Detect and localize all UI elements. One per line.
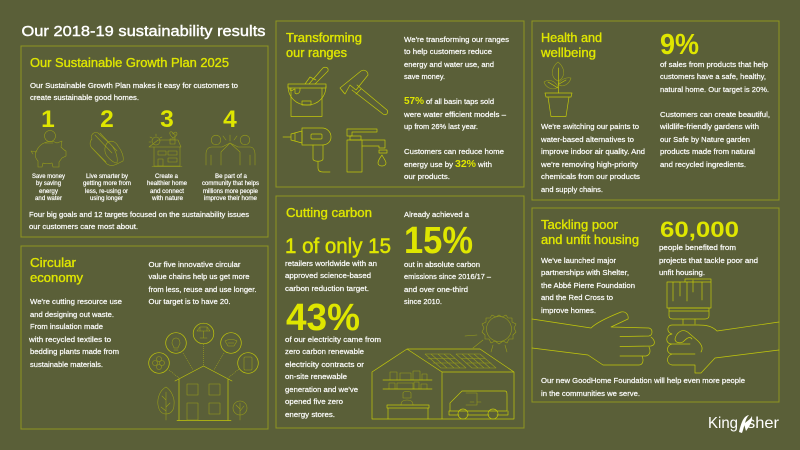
stat: 32% energy reduction: our products.: [404, 172, 450, 181]
stat: 43%: electricity contracts or: [285, 360, 364, 369]
text: circular value chains: value chains help us get more: [148, 272, 250, 281]
stat: 43%: [285, 297, 381, 419]
stat: 43%: 43%: [286, 297, 360, 339]
stat: 9%: natural home. Our target is 20%.: [660, 85, 769, 94]
stat: 57% of basin taps: were water efficient models –: [403, 110, 507, 119]
text: paints: and supply chains.: [541, 185, 603, 194]
heading: transforming our ranges: Transforming: [286, 31, 362, 45]
heading: health and wellbeing: Health and: [541, 31, 602, 45]
stat: 1 of only 15: [285, 235, 391, 293]
goal 3: healthier home: Create a: [155, 173, 178, 180]
goal 2: live smarter: getting more from: [83, 180, 131, 187]
text: transforming ranges: save money.: [404, 72, 445, 81]
stat: 43%: of our electricity came from: [285, 335, 381, 344]
stat: 15%: [404, 210, 492, 306]
heading: health and wellbeing: [540, 31, 602, 60]
panel: circular economy: [21, 246, 268, 429]
text: gardens: products made from natural: [660, 147, 755, 156]
goal 4: community: Be part of a: [215, 173, 247, 180]
goal 3: healthier home: and connect: [150, 188, 184, 195]
text: transforming ranges: [404, 35, 509, 81]
goal 3: healthier home: with nature: [151, 195, 183, 202]
text: partnerships: improve homes.: [541, 306, 596, 315]
stat: 15%: since 2010.: [404, 297, 442, 306]
text: circular value chains: from less, reuse and use longer.: [148, 285, 256, 294]
text: gardens: our Safe by Nature garden: [660, 135, 750, 144]
stat: 57% of basin taps: of all basin taps sold: [426, 97, 494, 106]
text: cutting resource use: with recycled textiles to: [28, 335, 111, 344]
stat: 15%: out in absolute carbon: [404, 260, 480, 269]
icon: hammer: [340, 70, 388, 115]
stat: 43%: generation and we've: [285, 385, 358, 394]
stat: 1 of only 15: retailers worldwide with an: [285, 259, 377, 268]
text: partnerships: the Abbé Pierre Foundation: [541, 281, 635, 290]
text: gardens: [659, 110, 770, 169]
text: transforming ranges: We're transforming our ranges: [404, 35, 509, 44]
goal 4: community: 4: [223, 106, 237, 133]
text: GoodHome Foundation: Our new GoodHome Foundation will help even more people: [541, 376, 745, 385]
text: gardens: and recycled ingredients.: [660, 160, 746, 169]
heading: tackling housing: and unfit housing: [541, 233, 639, 247]
icon: zero energy store: [372, 315, 516, 419]
goal 1: save money: and water: [35, 195, 63, 202]
text: circular value chains: Our target is to have 20.: [148, 297, 230, 306]
stat: 43%: on-site renewable: [285, 372, 347, 381]
stat: 60,000: 60,000: [660, 217, 739, 242]
goal 3: healthier home: healthier home: [147, 180, 187, 187]
closing text: [29, 210, 249, 231]
text: circular value chains: Our five innovative circular: [148, 260, 241, 269]
goal 4: community: improve their home: [204, 195, 257, 202]
title: Our 2018-19 sustainability results: [22, 24, 266, 40]
closing text: Four big goals and 12 targets focused on the sustainability issues: [29, 210, 249, 219]
panel: transforming our ranges: [276, 21, 524, 187]
stat: 32% energy reduction: [404, 147, 504, 181]
stat: 43%: zero carbon renewable: [285, 347, 364, 356]
text: cutting resource use: From insulation made: [30, 322, 103, 331]
text: paints: [540, 122, 645, 194]
text: gardens: Customers can create beautiful,: [660, 110, 770, 119]
stat: 1 of only 15: 1 of only 15: [285, 235, 391, 258]
text: cutting resource use: sustainable materials.: [30, 360, 103, 369]
text: transforming ranges: to help customers reduce: [404, 47, 492, 56]
stat: 15%: emissions since 2016/17 –: [404, 272, 492, 281]
goal 4: community: community that helps: [202, 180, 259, 187]
stat: 9%: [660, 29, 769, 94]
text: partnerships: partnerships with Shelter,: [541, 268, 629, 277]
stat: 60,000: [659, 217, 758, 277]
icon: drill: [283, 128, 331, 172]
stat: 57% of basin taps: up from 26% last year.: [404, 122, 478, 131]
goal 1: save money: energy: [39, 188, 59, 195]
logo: Kingfisher: sher: [747, 415, 780, 432]
stat: 32% energy reduction: with: [477, 160, 492, 169]
goal 2: live smarter: Live smarter by: [86, 173, 129, 180]
text: GoodHome Foundation: [541, 376, 745, 398]
stat: 60,000: people benefited from: [659, 243, 736, 252]
text: cutting resource use: We're cutting resource use: [30, 297, 122, 306]
goal 3: healthier home: 3: [160, 106, 174, 133]
text: cutting resource use: bedding plants made from: [30, 347, 119, 356]
stat: 60,000: unfit housing.: [659, 268, 705, 277]
logo: Kingfisher: [708, 415, 780, 433]
goal 2: live smarter: 2: [100, 106, 114, 133]
panel: cutting carbon: [276, 196, 524, 428]
text: circular value chains: [148, 260, 256, 306]
goal 1: save money: Save money: [32, 173, 66, 180]
text: partnerships: and the Red Cross to: [541, 293, 613, 302]
heading: circular economy: Circular: [30, 256, 76, 270]
text: partnerships: [541, 256, 635, 315]
icon: house with circular value chains: [149, 323, 258, 420]
goal 2: live smarter: [83, 106, 131, 202]
stat: 60,000: projects that tackle poor and: [659, 256, 758, 265]
text: GoodHome Foundation: in the communities we serve.: [541, 389, 640, 398]
panel: Our Sustainable Growth Plan 2025: [21, 46, 268, 237]
stat: 43%: opened five zero: [285, 397, 343, 406]
logo: Kingfisher: King: [708, 415, 738, 432]
heading: transforming our ranges: [286, 31, 362, 60]
goal 2: live smarter: using longer: [90, 195, 124, 202]
goal 4: community: [202, 106, 259, 202]
text: cutting resource use: [28, 297, 122, 369]
icon: tap: [347, 129, 387, 172]
text: paints: We're switching our paints to: [541, 122, 639, 131]
heading: circular economy: economy: [30, 271, 84, 285]
text: paints: chemicals from our products: [541, 172, 640, 181]
heading: transforming our ranges: our ranges: [286, 46, 347, 60]
goal 4: community: millions more people: [203, 188, 258, 195]
stat: 43%: energy stores.: [285, 410, 335, 419]
heading: health and wellbeing: wellbeing: [540, 46, 596, 60]
intro text: [30, 81, 238, 102]
stat: 15%: Already achieved a: [404, 210, 470, 219]
goal 2: live smarter: less, re-using or: [85, 188, 129, 195]
goal 3: healthier home: [147, 106, 187, 202]
text: transforming ranges: energy and water use, and: [404, 60, 494, 69]
text: paints: water-based alternatives to: [540, 135, 634, 144]
heading: tackling housing: Tackling poor: [541, 218, 618, 232]
stat: 32% energy reduction: Customers can reduce home: [404, 147, 504, 156]
stat: 1 of only 15: carbon reduction target.: [285, 284, 369, 293]
goal 1: save money: [31, 106, 66, 202]
stat: 9%: customers have a safe, healthy,: [660, 72, 766, 81]
stat: 15%: and over one-third: [404, 285, 468, 294]
heading: tackling housing: [541, 218, 639, 247]
stat: 32% energy reduction: energy use by: [404, 160, 453, 169]
stat: 57% of basin taps: [403, 96, 507, 131]
stat: 15%: 15%: [404, 220, 473, 262]
text: cutting resource use: and designing out waste.: [30, 310, 114, 319]
stat: 32% energy reduction: 32%: [455, 159, 476, 170]
icon: paint bucket: [288, 67, 328, 116]
text: paints: we're removing high-priority: [540, 160, 638, 169]
text: gardens: wildlife-friendly gardens with: [659, 122, 759, 131]
heading: growth plan: Our Sustainable Growth Plan 2025: [30, 56, 229, 70]
stat: 1 of only 15: approved science-based: [285, 271, 371, 280]
closing text: our customers care most about.: [29, 222, 138, 231]
intro text: Our Sustainable Growth Plan makes it easy for customers to: [30, 81, 238, 90]
stat: 57% of basin taps: 57%: [404, 96, 424, 107]
intro text: create sustainable good homes.: [30, 93, 139, 102]
text: partnerships: We've launched major: [541, 256, 616, 265]
stat: 9%: 9%: [660, 29, 699, 61]
heading: cutting carbon: Cutting carbon: [286, 206, 372, 220]
goal 1: save money: by saving: [36, 180, 61, 187]
stat: 9%: of sales from products that help: [660, 60, 768, 69]
goal 1: save money: 1: [41, 106, 55, 133]
heading: circular economy: [30, 256, 84, 285]
panel: tackling poor and unfit housing: [532, 208, 779, 402]
icon: potted plant: [544, 62, 572, 116]
icon: hands passing paintbrush: [532, 279, 779, 373]
panel: health and wellbeing: [532, 21, 779, 200]
text: paints: improve indoor air quality. And: [541, 147, 645, 156]
